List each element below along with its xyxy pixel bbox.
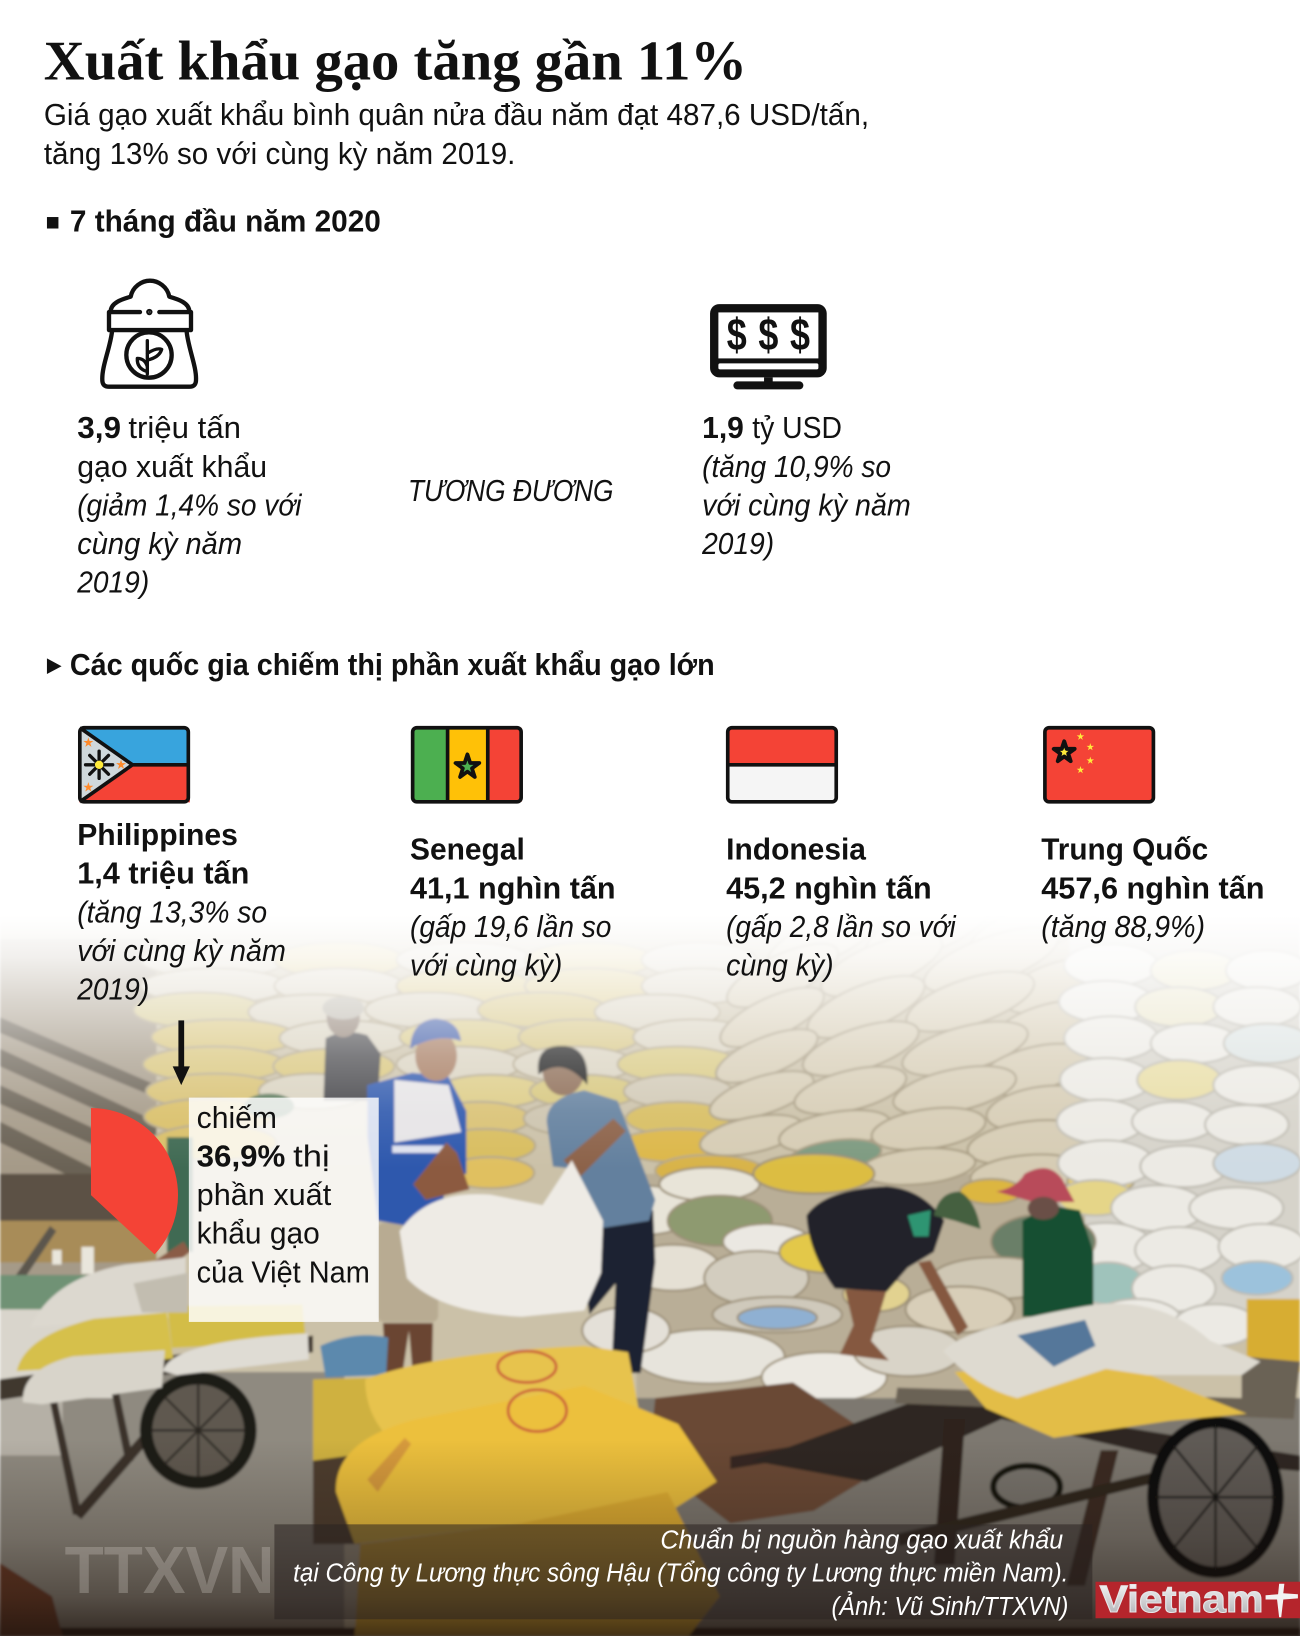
icon: monitor with dollars: $ xyxy=(727,309,747,360)
watermark: TTXVN: TTXVN xyxy=(65,1534,274,1608)
stat: rice volume: triệu tấn xyxy=(128,412,241,445)
stat: export value: 2019) xyxy=(701,528,774,561)
people group xyxy=(134,996,1093,1379)
subtitle: Giá gạo xuất khẩu bình quân nửa đầu năm đạt 487,6 USD/tấn, xyxy=(44,99,869,132)
left cart group xyxy=(0,1257,313,1519)
callout: market share: 36,9% xyxy=(197,1140,285,1173)
stat: export value: (tăng 10,9% so xyxy=(702,451,891,484)
photo: rice warehouse workers and sacks xyxy=(0,882,1300,1636)
stat: export value xyxy=(701,412,911,561)
photo caption: Chuẩn bị nguồn hàng gạo xuất khẩu xyxy=(660,1524,1063,1554)
callout: market share: thị xyxy=(293,1140,330,1173)
callout: market share: chiếm xyxy=(197,1102,277,1135)
stat: export value: 1,9 xyxy=(702,412,744,445)
icon: China flag xyxy=(1045,728,1153,802)
photo caption: (Ảnh: Vũ Sinh/TTXVN) xyxy=(832,1590,1068,1621)
stat: rice volume: cùng kỳ năm xyxy=(77,528,242,561)
icon: rice bag xyxy=(102,281,196,387)
callout: market share xyxy=(189,1098,379,1322)
stat: rice volume: gạo xuất khẩu xyxy=(77,451,267,484)
equivalence label: TƯƠNG ĐƯƠNG xyxy=(408,475,613,508)
country: Indonesia xyxy=(726,834,957,983)
stat: rice volume: 3,9 xyxy=(77,412,121,445)
callout: market share: phần xuất xyxy=(197,1179,332,1212)
centre yellow sacks xyxy=(313,1335,904,1636)
section heading: market share: Các quốc gia chiếm thị phần xuất khẩu gạo lớn xyxy=(70,649,715,682)
section heading: first 7 months: 7 tháng đầu năm 2020 xyxy=(70,206,381,239)
country: Indonesia: Indonesia xyxy=(726,834,867,867)
title: Xuất khẩu gạo tăng gần 11% xyxy=(44,30,747,92)
photo darkening overlay xyxy=(0,1440,1300,1636)
country: China: 457,6 nghìn tấn xyxy=(1041,872,1265,905)
arrow xyxy=(173,1020,190,1085)
icon: Senegal flag xyxy=(413,728,522,802)
right cart group xyxy=(751,1304,1300,1586)
country: China xyxy=(1041,834,1265,944)
country: Philippines: (tăng 13,3% so xyxy=(77,896,267,929)
subtitle xyxy=(44,99,869,171)
country: China: (tăng 88,9%) xyxy=(1041,911,1205,944)
logo: Vietnam+: Vietnam xyxy=(1100,1578,1263,1620)
stat: rice volume: (giảm 1,4% so với xyxy=(77,489,303,522)
country: Philippines: Philippines xyxy=(77,819,238,852)
icon: monitor with dollars xyxy=(710,304,827,389)
photo caption: tại Công ty Lương thực sông Hậu (Tổng công ty Lương thực miền Nam). xyxy=(293,1558,1068,1588)
country: Philippines: 2019) xyxy=(76,974,149,1007)
stat: export value: tỷ USD xyxy=(752,412,842,445)
icon: Indonesia flag xyxy=(728,728,836,802)
callout: market share: của Việt Nam xyxy=(197,1256,370,1289)
stat: rice volume xyxy=(76,412,303,600)
icon: monitor with dollars: $ xyxy=(758,309,778,360)
country: Philippines: 1,4 triệu tấn xyxy=(77,858,249,891)
country: Philippines: với cùng kỳ năm xyxy=(77,935,286,968)
country: China: Trung Quốc xyxy=(1041,834,1208,867)
stat: export value: với cùng kỳ năm xyxy=(702,489,911,522)
country: Senegal: (gấp 19,6 lần so xyxy=(410,911,611,944)
country: Senegal xyxy=(410,834,616,983)
callout: market share: khẩu gạo xyxy=(197,1218,320,1251)
country: Indonesia: (gấp 2,8 lần so với xyxy=(726,911,957,944)
country: Philippines xyxy=(76,819,286,1007)
icon: monitor with dollars: $ xyxy=(790,309,810,360)
pie sector: 36.9% share xyxy=(91,1108,178,1254)
country: Senegal: 41,1 nghìn tấn xyxy=(410,872,616,905)
photo caption xyxy=(274,1524,1092,1621)
country: Indonesia: 45,2 nghìn tấn xyxy=(726,872,932,905)
stat: rice volume: 2019) xyxy=(76,567,149,600)
icon: Philippines flag xyxy=(79,728,190,802)
subtitle: tăng 13% so với cùng kỳ năm 2019. xyxy=(44,138,515,171)
top fade xyxy=(0,887,1300,1169)
country: Indonesia: cùng kỳ) xyxy=(726,950,834,983)
country: Senegal: với cùng kỳ) xyxy=(410,950,562,983)
country: Senegal: Senegal xyxy=(410,834,525,867)
